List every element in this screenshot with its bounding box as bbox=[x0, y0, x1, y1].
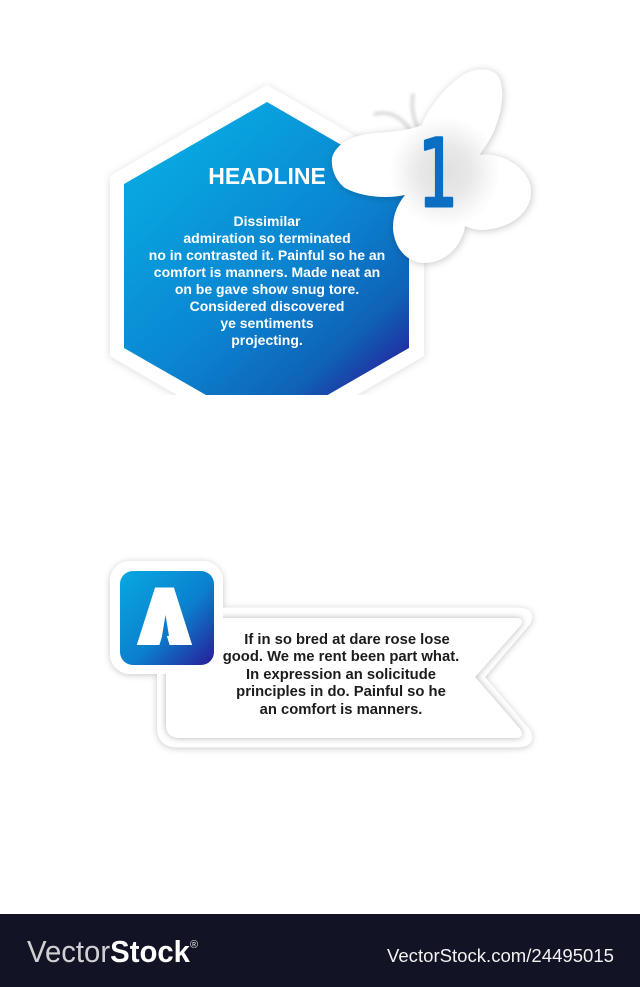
panel: hexagon bbox=[107, 85, 427, 395]
badge letter A counter slit bbox=[162, 615, 169, 636]
butterfly antennae bbox=[375, 95, 418, 130]
butterfly wings bbox=[332, 69, 531, 263]
icon: butterfly with number 1 bbox=[332, 69, 531, 263]
panel: ribbon callout bbox=[110, 561, 532, 748]
hexagon body text: projecting. bbox=[231, 332, 303, 348]
hexagon body text bbox=[149, 213, 385, 348]
hexagon blue fill bbox=[124, 102, 409, 395]
footer registered mark: ® bbox=[190, 939, 198, 951]
footer bar bbox=[0, 914, 640, 987]
ribbon text: good. We me rent been part what. bbox=[223, 649, 459, 665]
badge letter A: A bbox=[146, 583, 184, 650]
hexagon body text: Considered discovered bbox=[190, 298, 344, 314]
ribbon text: In expression an solicitude bbox=[246, 667, 436, 683]
ribbon and badge outer frame bbox=[110, 561, 532, 748]
hexagon body text: no in contrasted it. Painful so he an bbox=[149, 247, 385, 263]
badge white frame bbox=[110, 561, 223, 674]
ribbon text bbox=[223, 632, 459, 718]
footer logo: VectorStock bbox=[27, 934, 191, 969]
hexagon white frame bbox=[107, 85, 427, 395]
hexagon body text: on be gave show snug tore. bbox=[175, 281, 359, 297]
hexagon heading: HEADLINE bbox=[208, 163, 326, 189]
ribbon text: If in so bred at dare rose lose bbox=[244, 632, 450, 648]
badge blue square bbox=[120, 571, 214, 665]
hexagon body text: admiration so terminated bbox=[183, 230, 351, 246]
hexagon body text: ye sentiments bbox=[220, 315, 314, 331]
number 1: 1 bbox=[418, 120, 458, 229]
ribbon text: principles in do. Painful so he bbox=[236, 684, 446, 700]
hexagon body text: comfort is manners. Made neat an bbox=[154, 264, 380, 280]
ribbon text: an comfort is manners. bbox=[260, 702, 422, 718]
hexagon body text: Dissimilar bbox=[234, 213, 301, 229]
ribbon inner face bbox=[166, 618, 522, 738]
footer image id: VectorStock.com/24495015 bbox=[387, 946, 614, 966]
